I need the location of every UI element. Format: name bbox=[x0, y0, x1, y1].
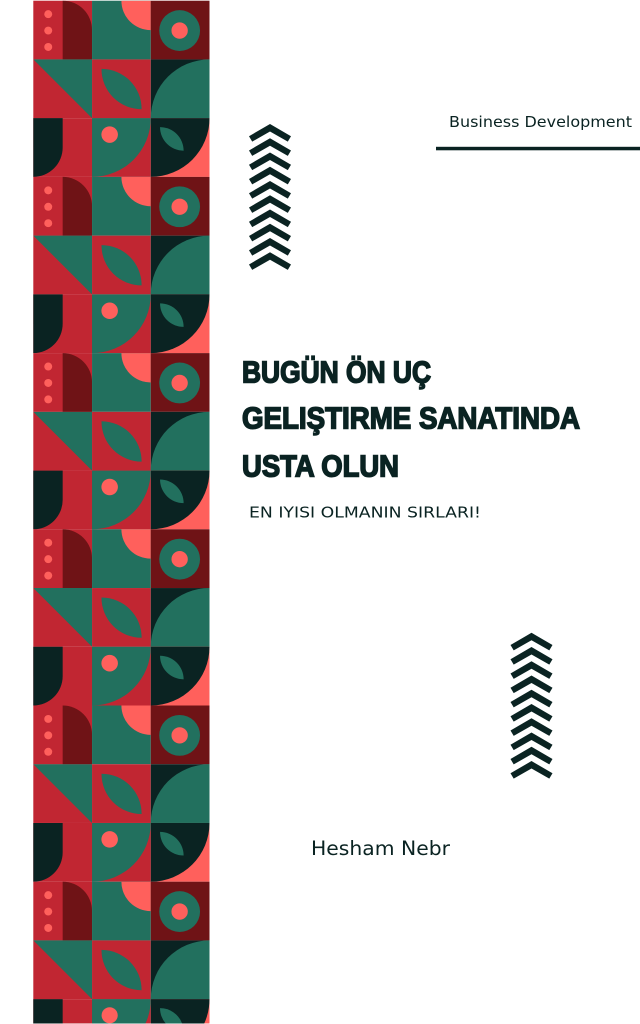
icon: upward chevrons top bbox=[249, 124, 291, 270]
title line 3: USTA OLUN bbox=[242, 449, 399, 483]
author name: Hesham Nebr bbox=[311, 837, 451, 860]
title bbox=[242, 354, 580, 483]
pattern tile 3 bbox=[33, 353, 210, 529]
pattern tile 6, cut at page bottom bbox=[33, 882, 210, 1023]
category label: Business Development bbox=[449, 114, 632, 131]
title line 1: BUGÜN ÖN UÇ bbox=[242, 354, 431, 389]
pattern tile 1 bbox=[33, 1, 210, 177]
panel: geometric pattern column bbox=[33, 1, 210, 1023]
pattern tile 5 bbox=[33, 706, 210, 882]
pattern tile 4 bbox=[33, 529, 210, 706]
rule under category label bbox=[436, 147, 640, 150]
icon: upward chevrons bottom bbox=[510, 633, 552, 779]
title line 2: GELIŞTIRME SANATINDA bbox=[242, 402, 580, 436]
subtitle: EN IYISI OLMANIN SIRLARI! bbox=[249, 504, 481, 522]
pattern tile 2 bbox=[33, 177, 210, 353]
